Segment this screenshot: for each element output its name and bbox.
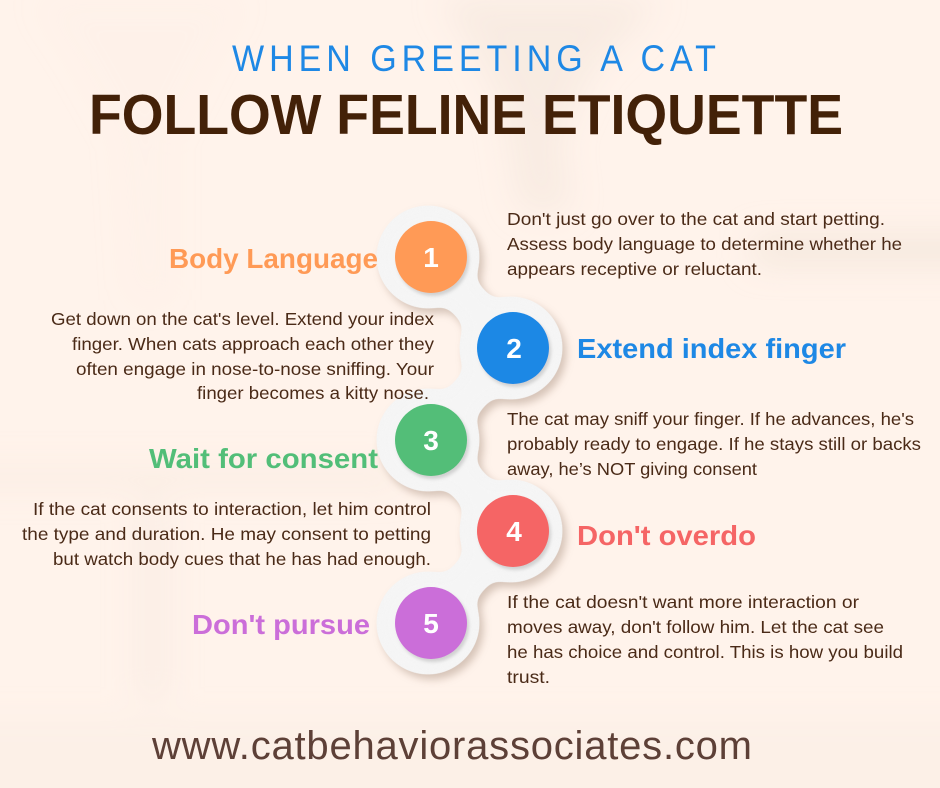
title: main heading: FOLLOW FELINE ETIQUETTE — [89, 83, 843, 147]
step 2 description: often engage in nose-to-nose sniffing. Your — [76, 359, 434, 379]
step 4 — [22, 495, 756, 569]
step 4 description — [22, 499, 431, 569]
step 5 description: If the cat doesn't want more interaction or — [507, 592, 859, 612]
step 3 circle — [395, 404, 467, 476]
step 2 number: 2 — [506, 333, 522, 364]
step 4 number: 4 — [506, 516, 522, 547]
step 2 description: Get down on the cat's level. Extend your index — [51, 309, 434, 329]
step 2 heading: Extend index finger — [577, 333, 846, 364]
title: subheading: WHEN GREETING A CAT — [232, 38, 716, 79]
step 4 heading: Don't overdo — [577, 520, 756, 551]
step 5 heading: Don't pursue — [192, 609, 370, 640]
step 3 — [149, 404, 921, 479]
step 5 description: moves away, don't follow him. Let the cat see — [507, 617, 884, 637]
step 2 description: finger becomes a kitty nose. — [197, 383, 429, 403]
step 1 heading: Body Language — [169, 243, 378, 274]
step 5 description — [507, 592, 903, 687]
step 3 description: away, he’s NOT giving consent — [507, 459, 757, 479]
step 1 description: appears receptive or reluctant. — [507, 259, 762, 279]
step 4 description: the type and duration. He may consent to petting — [22, 524, 431, 544]
step 2 description — [51, 309, 434, 403]
step 4 description: If the cat consents to interaction, let him control — [33, 499, 431, 519]
step 3 number: 3 — [423, 425, 439, 456]
step 2 description: finger. When cats approach each other they — [72, 334, 434, 354]
step 2 — [51, 309, 846, 403]
step 5 description: he has choice and control. This is how you build — [507, 642, 903, 662]
website footer: www.catbehaviorassociates.com — [151, 724, 752, 768]
step 4 description: but watch body cues that he has had enough. — [53, 549, 431, 569]
step 1 description: Don't just go over to the cat and start petting. — [507, 209, 885, 229]
step 3 heading: Wait for consent — [149, 443, 378, 474]
step 5 circle — [395, 587, 467, 659]
step 3 description: probably ready to engage. If he stays still or backs — [507, 434, 921, 454]
step 4 circle — [477, 495, 549, 567]
step 1 description — [507, 209, 902, 279]
step 5 description: trust. — [507, 667, 550, 687]
step 1 description: Assess body language to determine whether he — [507, 234, 902, 254]
step 3 description — [507, 409, 921, 479]
step 5 — [192, 587, 903, 687]
step 5 number: 5 — [423, 608, 439, 639]
step 1 — [169, 209, 902, 293]
step 1 circle — [395, 221, 467, 293]
step 1 number: 1 — [423, 242, 439, 273]
connected stepper backing shape — [377, 206, 562, 674]
step 2 circle — [477, 312, 549, 384]
step 3 description: The cat may sniff your finger. If he advances, he's — [507, 409, 914, 429]
